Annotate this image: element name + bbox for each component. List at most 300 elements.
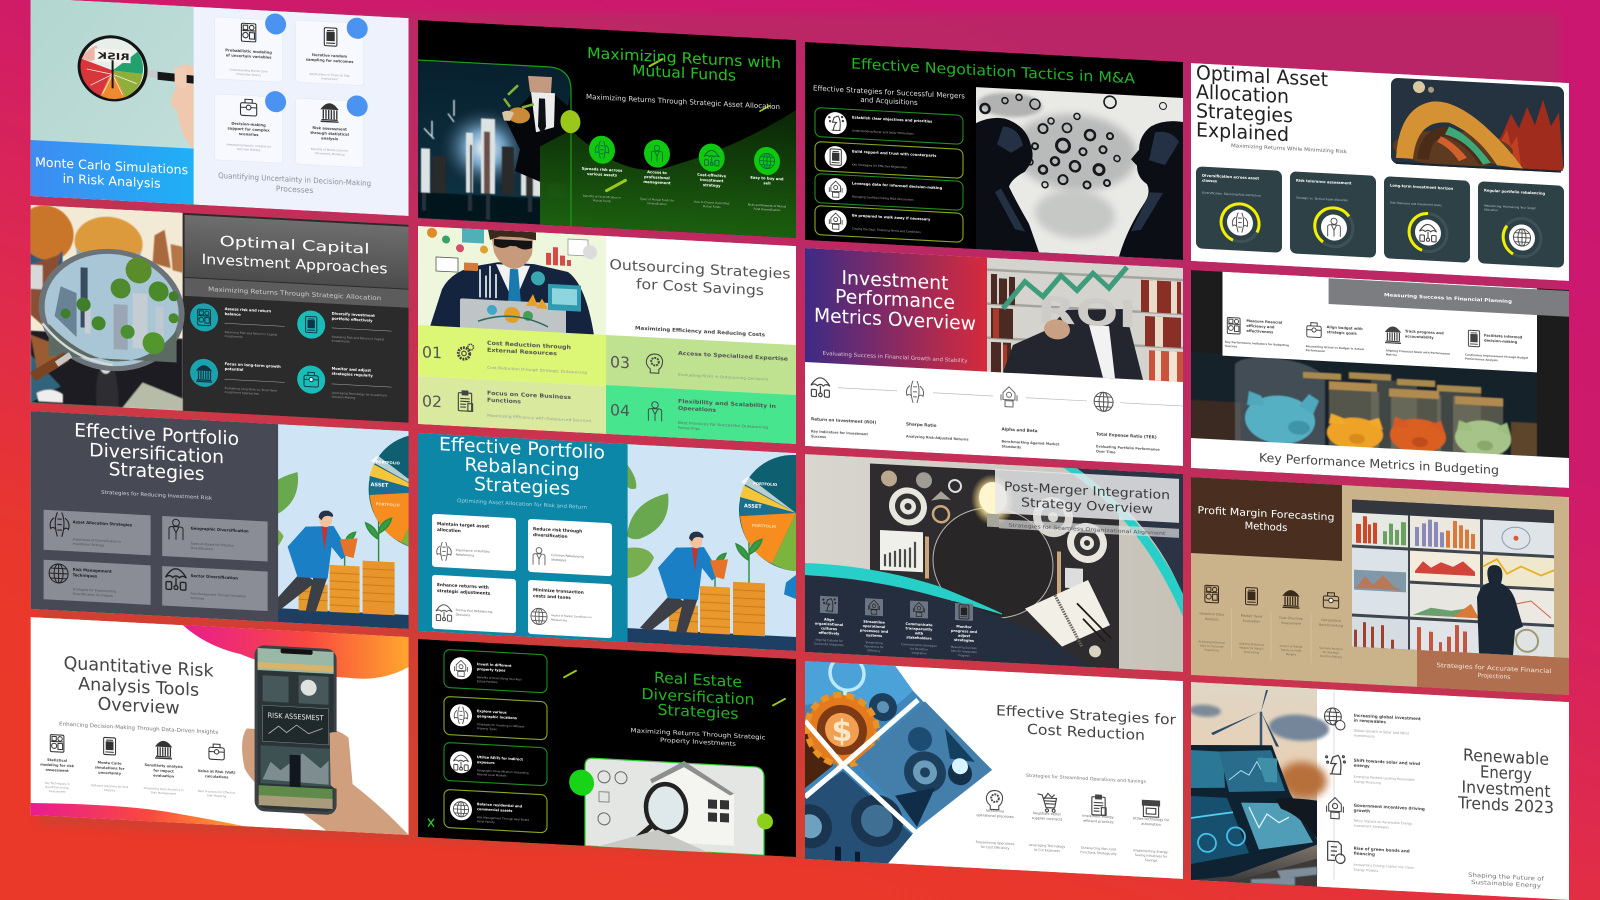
item: ROI: Return on Investment (ROI) [811, 416, 876, 425]
quadrant 03: 03 [610, 353, 630, 372]
item: monitor strategies: strategies regularly [332, 372, 373, 378]
item: green bonds: financing [1354, 851, 1375, 857]
item: monitor strategies: Decision-Making [332, 395, 356, 400]
item: solar and wind: Shift towards solar and wind [1354, 758, 1420, 766]
image: 3D financial landscape [1391, 78, 1564, 173]
card: reduce risk: Strategies [551, 558, 567, 562]
image: magnifier over green city [18, 204, 185, 411]
heading block: Investment [841, 267, 948, 295]
column: technology: Implementing Energy- [1133, 848, 1169, 854]
item: financial efficiency: efficiency and [1246, 324, 1275, 329]
item: government incentives: Policy Impacts on Renewable Energy [1354, 819, 1412, 826]
column: Monte Carlo: Monte Carlo [98, 761, 122, 766]
column: streamline: Streamline [986, 809, 1004, 814]
panel: Optimal Asset Allocation slide [1191, 61, 1569, 281]
image: gears in diamond tiles [788, 653, 992, 869]
subtitle: Quantifying Uncertainty in Decision-Making [218, 171, 371, 188]
card: risk assessment: analysis [321, 136, 339, 141]
column: historical data: Analyzing Historical [1198, 639, 1225, 645]
card: risk assessment: Risk assessment [312, 126, 347, 132]
quadrant 01: Cost Reduction through Strategic Outsourcing [487, 365, 588, 375]
item: assess risk: Investments [225, 334, 243, 339]
subtitle [630, 727, 766, 749]
panel: Monte Carlo Simulations slide [31, 0, 409, 216]
item: spreads risk: various assets [587, 172, 618, 178]
column: competitive benchmarking: Scenario Analysis [1319, 646, 1343, 651]
card: long-term horizon: Risk Tolerance and Investment Goals [1390, 201, 1442, 207]
item: cost-effective strategy: investment [700, 178, 724, 183]
decorative green hill [540, 96, 796, 238]
title: Effective Strategies for [996, 703, 1176, 729]
item: informed decisions: Continuous Improvement through Budget [1465, 353, 1529, 360]
item: streamline processes: operational [863, 624, 885, 629]
column: value at risk: Risk Modeling [207, 793, 227, 798]
column: statistical modeling [40, 734, 75, 794]
title: Diversification [89, 440, 224, 468]
item: communicate: transparently [906, 626, 933, 632]
card: maintain allocation: Importance of Portfolio [456, 548, 490, 554]
item: global investment: in renewables [1354, 718, 1386, 724]
item: solar and wind [1326, 755, 1420, 787]
image: piggy banks in jars [1191, 352, 1537, 460]
item: spreads risk: Benefits of Diversification in [583, 194, 621, 200]
card: probabilistic modeling: Understanding Monte Carlo [229, 68, 268, 74]
card: minimize costs: costs and taxes [533, 593, 571, 601]
card: minimize costs: Rebalancing [551, 618, 567, 622]
card: probabilistic modeling [215, 10, 286, 83]
quadrant 02: Maximizing Efficiency with Outsourced Services [487, 413, 591, 423]
card: enhance returns: Enhance returns with [437, 582, 489, 591]
column: energy: efficient practices [1083, 819, 1114, 824]
box: geographic locations: Explore various [477, 709, 507, 715]
image: dark strategy board [870, 463, 1119, 669]
timeline line [1333, 692, 1335, 880]
item: diversify portfolio [297, 310, 392, 346]
item: monitor: KPIs for Integration [951, 649, 977, 654]
image: hand holding phone [242, 644, 409, 835]
title: Explained [1196, 118, 1289, 146]
box: REITs: Utilize REITs for indirect [477, 755, 523, 762]
heading block: Investment Approaches [202, 252, 388, 278]
card: diversification: Diversification across asset [1202, 174, 1259, 181]
title: Mutual Funds [632, 61, 736, 85]
card: probabilistic modeling: Simulation Basics [236, 72, 261, 77]
panel: Portfolio Diversification slide [31, 411, 483, 633]
column: technology: Savings [1145, 858, 1158, 863]
banner: slide title: in Risk Analysis [63, 171, 161, 191]
box: residential and commercial: Risk Management Through Real Estate [477, 815, 529, 822]
column: energy: Implement energy- [1082, 814, 1115, 819]
title: Quantitative Risk [64, 654, 214, 682]
item: streamline processes: systems [866, 633, 882, 638]
card: risk tolerance: Risk tolerance assessment [1296, 179, 1352, 186]
item: Alpha and Beta [1001, 386, 1087, 453]
item: communicate: Communicate [906, 622, 933, 627]
image: gears in diamond tiles: $ [832, 713, 852, 750]
item: track progress [1385, 327, 1450, 360]
card: asset allocation: Asset Allocation Strategies [73, 519, 133, 527]
column: cost structure: Margins [1286, 652, 1297, 657]
left panel [418, 433, 628, 642]
item: assess risk: Assess risk and return [225, 307, 272, 313]
item: monitor: adjust [958, 634, 970, 638]
card: risk assessment: Uncertainty Modeling [315, 151, 345, 157]
quadrant 02: 02 [422, 392, 442, 411]
item: informed decisions [1465, 330, 1529, 364]
banner: slide title: Monte Carlo Simulations [35, 154, 188, 177]
column: market trend [1239, 587, 1264, 655]
item: track progress: Track progress and [1405, 329, 1444, 335]
card: risk assessment: through statistical [310, 131, 349, 137]
quadrant 03: Access to Specialized Expertise [678, 351, 788, 363]
item: assess risk: balance [225, 312, 241, 317]
banner: slide title [31, 140, 194, 205]
item: global investment: Global Growth in Solar and Wind [1354, 729, 1409, 736]
column: cost structure: Cost Structure [1279, 616, 1303, 621]
card: decision-making support: Decision-making [231, 122, 266, 127]
title box [995, 469, 1179, 523]
subtitle: Optimizing Asset Allocation for Risk and Return [457, 498, 587, 511]
panel: Negotiation Tactics slide [805, 42, 1183, 260]
column: value at risk: calculations [205, 774, 228, 779]
card: decision-making support: support for complex [228, 126, 270, 133]
card: maintain allocation: Maintain target asset [437, 521, 489, 530]
box: REITs [444, 742, 547, 786]
title [1457, 745, 1554, 817]
pie labels: PORTFOLIO [752, 523, 777, 529]
item: TER: Evaluating Portfolio Performance [1096, 444, 1160, 452]
title: Renewable [1463, 745, 1549, 769]
subtitle band [999, 519, 1179, 538]
card: minimize costs: Impact of Market Conditions on [551, 613, 592, 619]
column: cost structure: Assessment [1281, 621, 1302, 626]
item: global investment [1324, 708, 1421, 741]
item: green bonds: Energy Projects [1354, 868, 1379, 873]
item: financial efficiency [1225, 317, 1289, 351]
item: Alpha and Beta: Alpha and Beta [1002, 426, 1038, 433]
item: track progress: accountability [1405, 334, 1434, 340]
card: enhance returns: Timing Your Rebalancing [455, 608, 493, 614]
quadrant 02: Focus on Core Business [487, 391, 572, 401]
column: streamline: Streamlining Operations [976, 840, 1015, 846]
card: risk management: Strategies for Implementing [73, 587, 116, 594]
box: geographic locations: Property Types [477, 726, 497, 731]
quadrant 01: External Resources [487, 348, 558, 357]
title [996, 703, 1176, 746]
item: government incentives: growth [1354, 808, 1370, 813]
card: geographic: Types of Assets for Effective [190, 541, 234, 548]
box: walk away [815, 206, 963, 242]
column: negotiate [1029, 792, 1065, 853]
card: decision-making support: scenarios [239, 132, 259, 137]
column: competitive benchmarking: for Strategic [1323, 650, 1340, 655]
card: risk tolerance: Strategic vs. Tactical Asset Allocation [1296, 196, 1348, 202]
column: technology: automation [1141, 822, 1161, 827]
title: Diversification [642, 685, 754, 709]
item: long-term growth: Investment Approaches [225, 390, 259, 396]
item: diversify portfolio: Diversify investment [332, 312, 375, 318]
card: risk management [44, 560, 151, 605]
white content panel [1222, 272, 1537, 372]
item: professional management: Types of Mutual Funds for [639, 197, 675, 203]
card: decision-making support: Interpreting Results: Insights for [226, 142, 272, 149]
box: property types: Estate Portfolio [477, 679, 498, 684]
item: TER: Over Time [1096, 449, 1116, 454]
title: Strategies [658, 701, 739, 723]
title: for Cost Savings [636, 277, 764, 299]
item: cost-effective strategy: Cost-effective [697, 173, 727, 178]
box: REITs: exposure [477, 760, 495, 765]
title: Effective Portfolio [74, 420, 239, 450]
panel: Real Estate Diversification slide [418, 639, 796, 857]
item: assess risk [190, 303, 285, 341]
column: historical data: Projections [1204, 648, 1220, 653]
pie labels: PORTFOLIO [376, 459, 401, 466]
card: risk tolerance [1290, 171, 1376, 258]
column: Monte Carlo: Analysis [104, 788, 116, 793]
decorative teal and navy curves [805, 563, 1002, 614]
card: geographic: Diversification [191, 546, 213, 551]
card: decision-making support: Decision Making [237, 147, 260, 152]
pie labels [744, 480, 778, 529]
column: historical data: Historical Data [1200, 611, 1224, 617]
item: informed decisions: Performance Analysis [1465, 357, 1498, 362]
item: align budget: strategic goals [1327, 330, 1357, 336]
subtitle block [1417, 650, 1569, 695]
card: maintain allocation: allocation [437, 527, 461, 534]
column: Monte Carlo: Software Solutions for Risk [91, 783, 129, 789]
card: reduce risk [528, 519, 612, 576]
item: streamline processes: processes and [860, 628, 889, 634]
card: geographic: Geographic Diversification [191, 525, 249, 534]
item: align cultures: effectively [819, 631, 840, 636]
subtitle band: Strategies for Seamless Organizational Alignment [1009, 523, 1166, 537]
column: statistical modeling: assessment [45, 768, 69, 773]
item: diversify portfolio: Assessing Risk and Return in Capital [332, 335, 384, 341]
title [642, 668, 754, 724]
panel: Key Performance Metrics slide [1191, 270, 1570, 488]
image: ROI letters held by a man [987, 258, 1183, 382]
subheading band [185, 278, 409, 308]
item: Sharpe ratio: Analyzing Risk-Adjusted Returns [906, 434, 969, 442]
item: green bonds: Innovations Driving Capital into Clean [1354, 863, 1414, 870]
item: align cultures: Aligning Cultures for [815, 638, 844, 643]
card: sector [162, 566, 268, 611]
subtitle: Effective Strategies for Successful Mergers [813, 84, 965, 100]
column: sensitivity analysis [144, 740, 184, 796]
title: Real Estate [654, 669, 742, 691]
card: iterative random sampling: Applications in Financial Risk [309, 72, 350, 78]
quadrant 04: Flexibility and Scalability in [678, 399, 776, 410]
item: solar and wind: Energy Financing [1354, 780, 1381, 785]
decorative gradient corner [183, 625, 409, 681]
item: cost-effective strategy: strategy [703, 183, 721, 188]
column: market trend: Models for Margin [1239, 646, 1264, 651]
column: energy [1080, 794, 1117, 856]
box: walk away: Be prepared to walk away if necessary [852, 213, 931, 222]
item: TER [1094, 392, 1183, 458]
item: long-term growth: Focus on long-term growth [225, 362, 281, 369]
subheading band: Maximizing Returns Through Strategic Allocation [208, 286, 381, 302]
column: competitive benchmarking: Benchmarking [1319, 623, 1343, 628]
card: iterative random sampling: sampling for outcomes [306, 58, 354, 64]
subtitle: Sustainable Energy [1471, 880, 1542, 890]
column: value at risk: Best Practices for Effective [198, 789, 236, 795]
title [74, 420, 239, 487]
item: diversify portfolio: Investments [332, 339, 350, 344]
column: market trend: Forecasting [1244, 650, 1260, 655]
item: financial efficiency: Measure financial [1246, 319, 1282, 325]
item: streamline processes: Operations for [864, 644, 885, 649]
column: negotiate: supplier contracts [1032, 816, 1062, 822]
card: minimize costs: Minimize transaction [533, 587, 584, 596]
item: government incentives: Investment Strategies [1354, 824, 1389, 830]
card: iterative random sampling: Iterative random [312, 53, 347, 59]
column: sensitivity analysis: evaluation [153, 773, 175, 779]
title box: Strategy Overview [1021, 494, 1153, 516]
item: global investment: Increasing global investment [1354, 713, 1421, 721]
item: align budget: Performance [1306, 348, 1325, 353]
item: monitor: progress and [951, 629, 977, 634]
title: Investment [1461, 777, 1551, 801]
card: long-term horizon [1384, 176, 1470, 263]
column: cost structure: Trends on Profit [1280, 648, 1301, 653]
image: hand holding phone: RISK ASSESMEST [268, 712, 324, 723]
quadrant 04: Partnerships [678, 426, 700, 431]
column: energy: Outsourcing Non-Core [1081, 846, 1116, 851]
panel: Quantitative Risk Analysis slide [31, 617, 409, 835]
quadrant 04 [606, 385, 796, 444]
image: businessman over night city [418, 60, 571, 226]
pie labels [371, 459, 401, 508]
card: enhance returns: Decisions [456, 612, 470, 617]
card: risk assessment: Benefits of Monte Carlo for [311, 147, 349, 153]
card: maintain allocation: Rebalancing [456, 552, 474, 557]
column: technology: Saving Initiatives for [1135, 853, 1168, 859]
card: reduce risk: Common Rebalancing [551, 553, 584, 559]
card: reduce risk: Reduce risk through [533, 526, 582, 535]
item: government incentives: Government incentives driving [1354, 803, 1425, 811]
box: establish objectives [815, 108, 963, 144]
card: long-term horizon: Long-term investment horizon [1390, 184, 1454, 191]
title: Strategies [1196, 99, 1293, 127]
item: professional management: Diversification [647, 201, 667, 206]
card: asset allocation: Importance of Diversification in [73, 537, 121, 544]
item: long-term growth [190, 358, 285, 397]
item: global investment: Investments [1354, 734, 1375, 739]
item: solar and wind: Emerging Markets Leading Renewable [1354, 775, 1415, 782]
item: Sharpe ratio: Sharpe Ratio [906, 421, 937, 428]
box: geographic locations: geographic locations [477, 714, 517, 720]
title: Overview [98, 695, 180, 719]
box: residential and commercial: Balance residential and [477, 802, 523, 809]
column: Monte Carlo [91, 737, 129, 793]
box: build rapport [815, 142, 963, 178]
subtitle: Maximizing Returns Through Strategic [630, 727, 766, 741]
item: long-term growth: Evaluating Long-Term vs. Short-Term [225, 386, 277, 393]
column: market trend: Utilizing Statistical [1239, 642, 1264, 647]
image: man viewing chart wall [1352, 500, 1554, 657]
heading block: Metrics Overview [814, 304, 976, 335]
column: sensitivity analysis: Risk Management [151, 790, 177, 796]
header band: Measuring Success in Financial Planning [1384, 292, 1512, 305]
pie labels: ASSET [744, 503, 762, 510]
card: reduce risk: diversification [533, 532, 568, 540]
heading block [805, 248, 987, 372]
heading block: Performance [835, 286, 955, 314]
card: sector: Risk Management Through Diversified [191, 591, 246, 598]
item: ROI: Success [811, 434, 826, 439]
item: communicate: Communication Strategies [901, 642, 937, 648]
column: sensitivity analysis: for impact [153, 769, 174, 774]
item: green bonds [1328, 841, 1414, 875]
card: regular rebalancing: Allocation [1484, 208, 1498, 212]
title: Cost Reduction [1027, 722, 1145, 744]
box: build rapport: Build rapport and trust with counterparts [852, 149, 936, 158]
item: informed decisions: decision-making [1484, 339, 1518, 344]
card: risk management: Risk Management [73, 567, 112, 574]
header band [1329, 278, 1570, 317]
item: cost-effective strategy: How to Choose Diversified [694, 200, 730, 206]
column: negotiate: to Cut Expenses [1034, 848, 1060, 853]
column: technology [1133, 800, 1170, 863]
box: residential and commercial: Asset Variety [477, 819, 495, 824]
column: value at risk: Value at Risk (VaR) [198, 769, 236, 775]
card: probabilistic modeling: Probabilistic modeling [225, 48, 272, 55]
subtitle: Strategies for Streamlined Operations and Savings [1026, 773, 1147, 785]
illustration: investor watering coins [253, 425, 483, 633]
box: walk away: Closing the Deal: Finalizing Terms and Conditions [852, 226, 921, 234]
item: track progress: Aligning Financial Goals with Performance [1386, 348, 1450, 356]
illustration: investor watering coins [623, 446, 853, 654]
subtitle [1468, 873, 1545, 890]
item: align cultures [814, 595, 844, 647]
box: property types [444, 649, 547, 693]
column: historical data: Data for Accurate [1200, 643, 1224, 649]
column: historical data: Analysis [1205, 617, 1219, 621]
card: enhance returns [432, 575, 516, 633]
box: geographic locations: Strategies for Investing in Different [477, 722, 524, 729]
item: align cultures: Successful Integration [814, 641, 844, 647]
image: house under magnifier [585, 756, 764, 855]
subtitle: Shaping the Future of [1468, 873, 1545, 883]
decorative gradient strip [31, 802, 245, 826]
box: establish objectives: Understanding Buyer and Seller Motivations [852, 128, 914, 136]
heading block [1191, 477, 1342, 561]
item: informed decisions: Facilitate informed [1484, 334, 1523, 340]
quadrant 04: Best Practices for Successful Outsourcing [678, 421, 768, 430]
item: financial efficiency: effectiveness [1246, 329, 1273, 334]
card: decision-making support [215, 88, 286, 164]
heading block: Methods [1245, 521, 1287, 534]
subtitle: Property Investments [660, 737, 736, 748]
card: sector: Portfolios [191, 596, 204, 601]
left panel [31, 411, 278, 622]
item: professional management: professional [644, 175, 670, 180]
item: communicate: with [915, 631, 924, 636]
title: Outsourcing Strategies [609, 257, 790, 283]
card: maintain allocation [432, 514, 516, 571]
item: Alpha and Beta: Benchmarking Against Market [1002, 439, 1060, 446]
column: statistical modeling: Quantitative Risk [45, 785, 70, 790]
item: easy to buy and sell: sell [763, 181, 771, 186]
item: streamline processes [860, 598, 889, 653]
panel: Investment Performance Metrics slide [805, 248, 1183, 466]
item: monitor: Measuring Success: [951, 645, 977, 650]
panel: Portfolio Rebalancing slide [418, 433, 853, 654]
column: competitive benchmarking: Competitive [1321, 618, 1341, 623]
item: monitor: Progress [958, 653, 970, 658]
